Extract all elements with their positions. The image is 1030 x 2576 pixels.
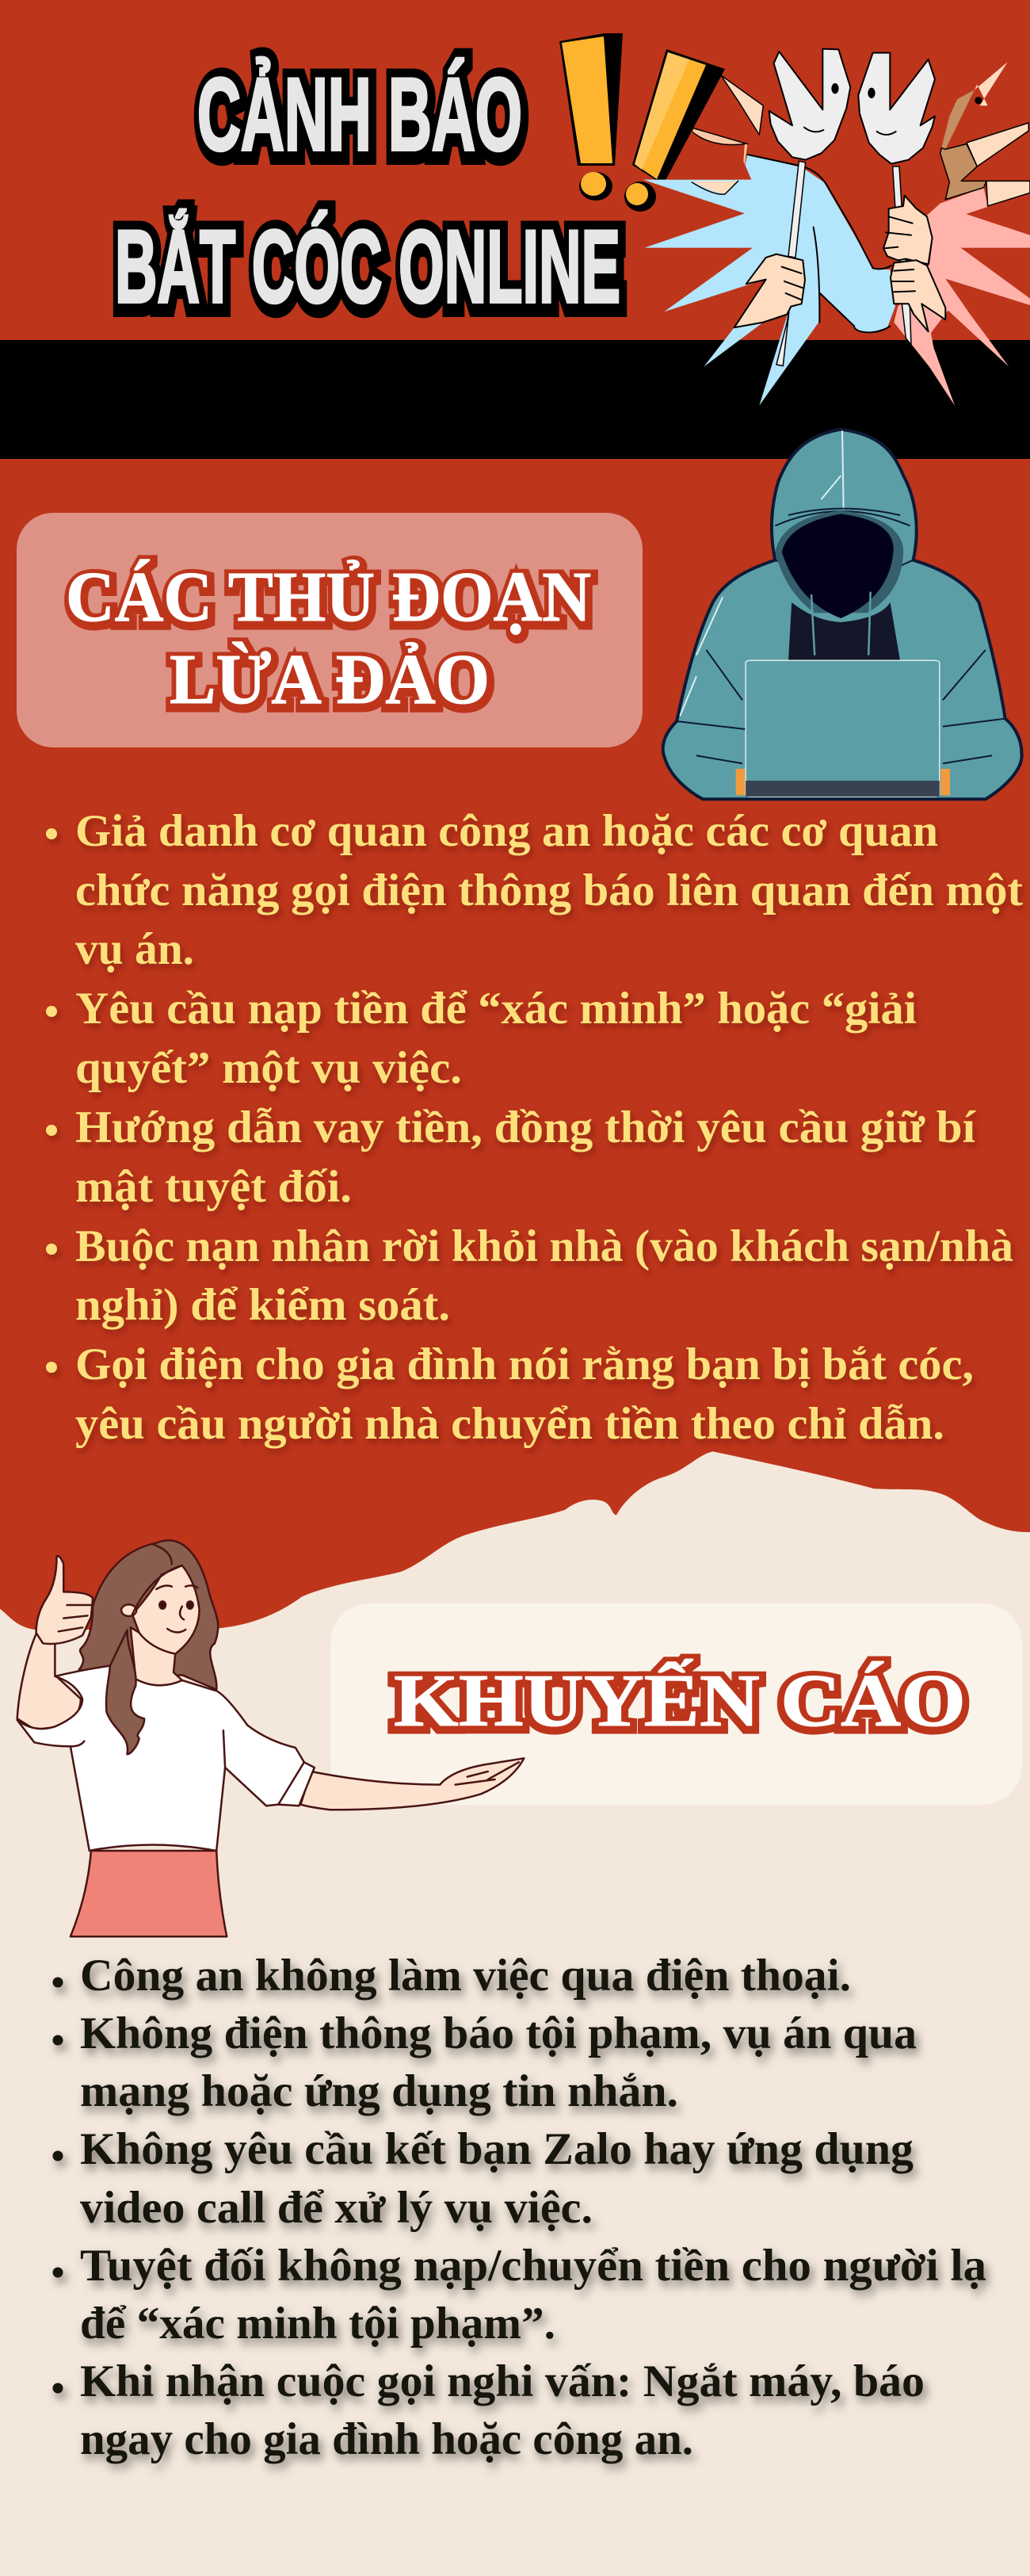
- hand left: [734, 254, 805, 327]
- heading text: [66, 558, 593, 721]
- hair back: [79, 1540, 218, 1690]
- icon: exclamation marks: [559, 33, 725, 212]
- illustration: hands holding smiling masks: [643, 49, 1030, 406]
- hoodie: [663, 430, 1022, 799]
- hands right: [883, 196, 933, 264]
- list: scam tactics: Hướng dẫn vay tiền, đồng thời yêu cầu giữ bí: [75, 1103, 976, 1152]
- raised forearm: [17, 1634, 81, 1729]
- mask right: [858, 53, 935, 164]
- wrists: [736, 769, 950, 795]
- list: recommendations: Khi nhận cuộc gọi nghi vấn: Ngắt máy, báo: [80, 2356, 925, 2406]
- bullets: [46, 828, 57, 1373]
- laptop: [746, 660, 940, 797]
- panel: heading "Các thủ đoạn lừa đảo": [17, 513, 643, 747]
- palm lines: [456, 1762, 519, 1785]
- heading text: KHUYẾN CÁO: [394, 1661, 966, 1744]
- laptop edge: [746, 781, 940, 797]
- list: recommendations: Công an không làm việc qua điện thoại.: [80, 1951, 851, 2001]
- title: CẢNH BÁO: [197, 56, 522, 172]
- list: recommendations: Tuyệt đối không nạp/chuyển tiền cho người lạ: [80, 2241, 986, 2291]
- illustration: woman thumbs up and presenting: [17, 1540, 524, 1936]
- title: [115, 56, 622, 327]
- heading pill: [330, 1603, 1022, 1805]
- thumbs up hand: [36, 1556, 93, 1644]
- heading text: CÁC THỦ ĐOẠN: [66, 558, 591, 636]
- hair and face fragments, right person: [941, 90, 975, 149]
- list: scam tactics: Giả danh cơ quan công an hoặc các cơ quan: [75, 806, 938, 856]
- sleeve folds: [677, 509, 1005, 763]
- list: recommendations: video call để xử lý vụ việc.: [80, 2183, 593, 2233]
- mask right face: [868, 88, 896, 135]
- heading pill: [17, 513, 643, 747]
- list: scam tactics: Yêu cầu nạp tiền để “xác minh” hoặc “giải: [75, 984, 917, 1034]
- hoodie strings: [811, 592, 871, 655]
- pink shirt burst: [894, 188, 1030, 406]
- shirt: [17, 1666, 315, 1851]
- list: scam tactics: Gọi điện cho gia đình nói rằng bạn bị bắt cóc,: [75, 1340, 974, 1389]
- hood inner shade: [775, 510, 903, 613]
- hood seam and highlights: [680, 430, 844, 716]
- list: recommendations: ngay cho gia đình hoặc công an.: [80, 2414, 693, 2464]
- finger lines: [59, 1605, 91, 1631]
- dark shirt: [788, 602, 900, 660]
- hair strands: [132, 1544, 182, 1615]
- extended arm: [300, 1758, 524, 1810]
- list: scam tactics: yêu cầu người nhà chuyển tiền theo chỉ dẫn.: [75, 1399, 944, 1449]
- list: scam tactics: Buộc nạn nhân rời khỏi nhà (vào khách sạn/nhà: [75, 1221, 1013, 1271]
- blue shirt outlines: [747, 155, 891, 332]
- title: BẮT CÓC ONLINE: [116, 211, 622, 327]
- mask handles: [776, 161, 911, 366]
- bullets: [52, 1977, 63, 2394]
- heading text: KHUYẾN CÁO: [394, 1660, 966, 1742]
- heading text: LỪA ĐẢO: [171, 643, 491, 721]
- list: recommendations: Không yêu cầu kết bạn Zalo hay ứng dụng: [80, 2124, 914, 2174]
- list: scam tactics: mật tuyệt đối.: [75, 1162, 352, 1212]
- title: CẢNH BÁO: [199, 59, 524, 174]
- title: BẮT CÓC ONLINE: [115, 208, 620, 324]
- list: recommendations: để “xác minh tội phạm”.: [80, 2299, 555, 2349]
- list: recommendations: Không điện thông báo tội phạm, vụ án qua: [80, 2008, 917, 2058]
- list: scam tactics: nghỉ) để kiểm soát.: [75, 1280, 450, 1330]
- list: scam tactics: chức năng gọi điện thông báo liên quan đến một: [75, 866, 1023, 915]
- heading text: LỪA ĐẢO: [170, 640, 490, 719]
- background: cream wave lower section: [0, 1451, 1030, 2576]
- heading text: CÁC THỦ ĐOẠN: [67, 560, 593, 639]
- neck and face: [121, 1565, 200, 1685]
- mask left face: [804, 83, 839, 132]
- list: scam tactics: quyết” một vụ việc.: [75, 1043, 462, 1093]
- blue shirt burst: [643, 155, 895, 406]
- list: recommendations: mạng hoặc ứng dụng tin nhắn.: [80, 2066, 678, 2116]
- hair front lock: [106, 1630, 144, 1754]
- list: scam tactics: [46, 806, 1023, 1449]
- skin fragments, left person: [721, 75, 763, 135]
- sleeve seams: [71, 1730, 304, 1805]
- black header band: [0, 340, 1030, 459]
- hood opening and chest: [782, 514, 894, 618]
- panel: heading "Khuyến cáo": [330, 1603, 1022, 1805]
- mask left: [769, 49, 850, 160]
- skirt: [71, 1851, 227, 1936]
- list: recommendations: [52, 1951, 986, 2464]
- list: scam tactics: vụ án.: [75, 924, 194, 974]
- illustration: hooded hacker with laptop: [663, 430, 1022, 799]
